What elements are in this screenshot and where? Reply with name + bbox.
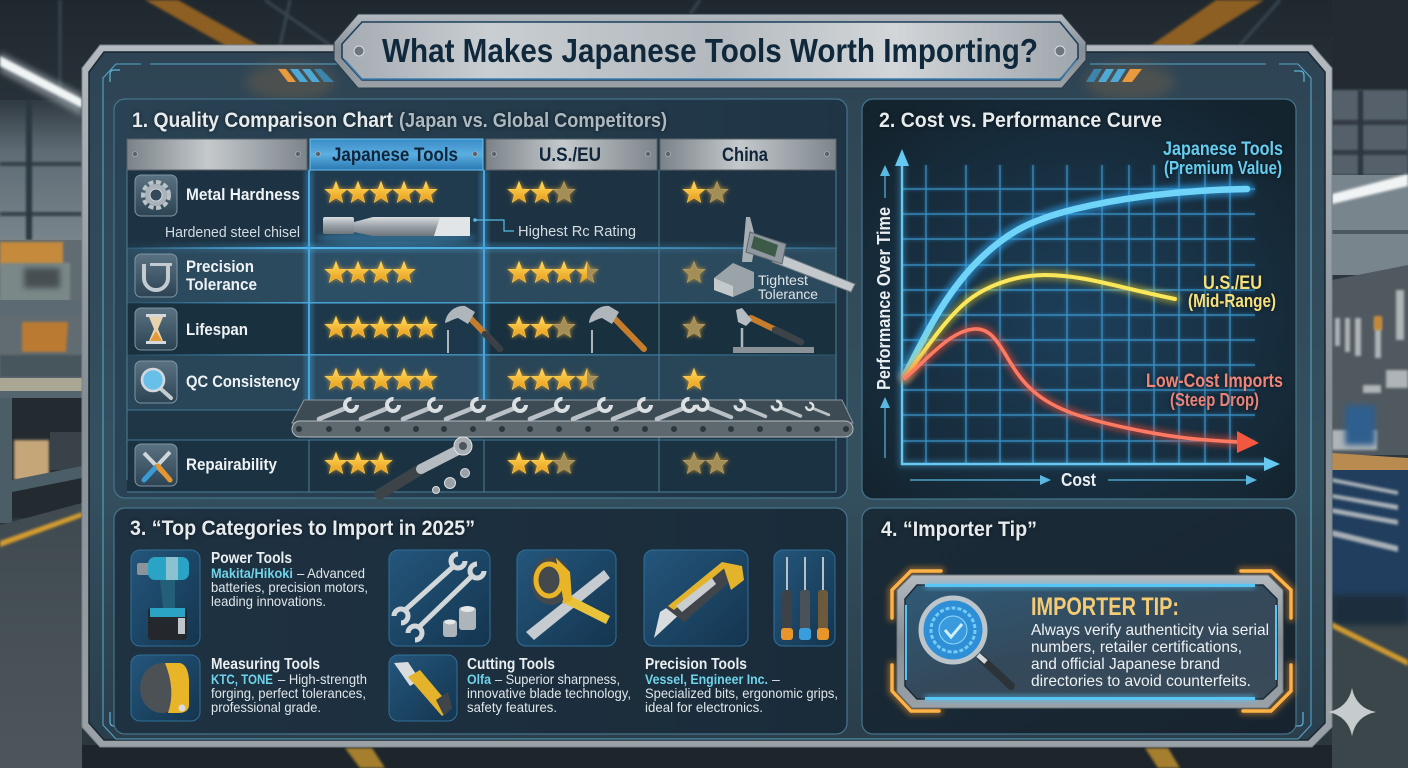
precision tools text: Precision Tools — [645, 656, 747, 673]
orange brackets — [892, 571, 1291, 711]
row: repairability — [135, 444, 728, 486]
cutting tools text: – Superior sharpness, — [495, 671, 620, 687]
curve: us/eu — [905, 275, 1175, 378]
row: precision tolerance: Precision — [186, 257, 254, 276]
precision tools text — [645, 656, 838, 715]
tip text: Always verify authenticity via serial — [1031, 622, 1269, 639]
label: low-cost imports — [1146, 371, 1283, 410]
power tools text: Makita/Hikoki — [211, 565, 293, 581]
curve: low-cost imports — [905, 329, 1259, 453]
tip text: numbers, retailer certifications, — [1031, 639, 1242, 656]
precision tools text: – — [772, 671, 780, 687]
row: metal hardness: Metal Hardness — [186, 185, 300, 204]
tip text — [1031, 593, 1269, 690]
stars — [325, 182, 728, 202]
icon: wrenches and sockets — [389, 550, 490, 646]
y axis title — [874, 165, 894, 458]
tip text: IMPORTER TIP: — [1031, 593, 1179, 621]
label: japanese tools: (Premium Value) — [1164, 158, 1282, 178]
label: japanese tools: Japanese Tools — [1163, 139, 1283, 160]
icon: crossed tools — [135, 444, 177, 486]
icon: ratchet and nuts — [380, 437, 472, 494]
table row bands — [127, 170, 836, 492]
power tools text: – Advanced — [297, 565, 365, 581]
title text: What Makes Japanese Tools Worth Importing? — [382, 32, 1038, 69]
icon: cordless drill — [131, 550, 200, 646]
icon: gear — [135, 175, 177, 216]
conveyor belt of wrenches — [292, 399, 853, 437]
icon: micrometer — [135, 254, 177, 297]
tip text: and official Japanese brand — [1031, 656, 1220, 673]
stars — [325, 368, 705, 389]
y axis title: Performance Over Time — [874, 207, 894, 390]
precision tools text: Vessel, Engineer Inc. — [645, 671, 768, 687]
measuring tools text: forging, perfect tolerances, — [211, 685, 366, 701]
panel 4: importer tip — [862, 508, 1296, 734]
label: low-cost imports: Low-Cost Imports — [1146, 371, 1283, 392]
row: precision tolerance — [135, 254, 705, 297]
curve: japanese tools — [905, 189, 1247, 375]
cutting tools text: innovative blade technology, — [467, 685, 631, 701]
stars — [325, 316, 705, 337]
cutting tools text: safety features. — [467, 699, 557, 715]
table header: U.S./EU — [539, 145, 601, 166]
measuring tools text: KTC, TONE — [211, 671, 273, 687]
icon: cutter — [389, 655, 457, 721]
chart grid — [902, 165, 1255, 464]
title plate — [334, 14, 1086, 88]
cutting tools text — [467, 656, 631, 715]
table grid lines — [127, 170, 836, 492]
table header: China — [722, 145, 768, 166]
label: japanese tools — [1163, 139, 1283, 178]
panel 1 heading: (Japan vs. Global Competitors) — [399, 110, 667, 132]
icon: chisel — [316, 217, 476, 245]
power tools text: batteries, precision motors, — [211, 579, 368, 595]
panel 3 heading: 3. “Top Categories to Import in 2025” — [130, 517, 475, 540]
corner sparkle mark — [1328, 688, 1376, 736]
right hazard stripes — [1086, 69, 1142, 82]
panel 1 heading — [132, 109, 667, 132]
measuring tools text: professional grade. — [211, 699, 321, 715]
caliper label: Tightest — [758, 272, 808, 288]
panel 1 heading: 1. Quality Comparison Chart — [132, 109, 393, 132]
label: low-cost imports: (Steep Drop) — [1170, 390, 1259, 410]
tip card — [897, 575, 1283, 708]
row: lifespan: Lifespan — [186, 320, 248, 339]
panel 1: quality comparison chart — [114, 99, 847, 498]
icon: screwdrivers — [774, 550, 835, 646]
panel 4 heading: 4. “Importer Tip” — [881, 518, 1037, 541]
icon: utility knife — [644, 550, 748, 646]
icon: verification magnifier — [921, 598, 1011, 686]
table header — [127, 139, 836, 170]
icon: hammer china — [733, 308, 814, 353]
icon: magnifier — [135, 361, 177, 403]
cutting tools text: Cutting Tools — [467, 656, 555, 673]
row: qc consistency — [135, 361, 705, 403]
panel 2 heading: 2. Cost vs. Performance Curve — [879, 109, 1162, 132]
measuring tools text: – High-strength — [278, 671, 367, 687]
label: us/eu: U.S./EU — [1203, 273, 1262, 294]
icon: hammer japan — [445, 306, 500, 353]
stars — [325, 452, 728, 473]
icon: hammer us — [589, 306, 644, 353]
table header: Japanese Tools — [332, 145, 458, 166]
power tools text — [211, 550, 368, 609]
power tools text: leading innovations. — [211, 593, 326, 609]
measuring tools text: Measuring Tools — [211, 656, 320, 673]
row: repairability: Repairability — [186, 455, 277, 474]
callout: highest rc rating — [473, 218, 636, 240]
row: metal hardness — [135, 175, 728, 245]
icon: hourglass — [135, 308, 177, 350]
stars — [325, 262, 705, 282]
label: us/eu — [1188, 273, 1276, 311]
row: qc consistency: QC Consistency — [186, 372, 300, 391]
precision tools text: ideal for electronics. — [645, 699, 763, 715]
row: metal hardness: Hardened steel chisel — [165, 225, 300, 241]
icon: tape and ruler — [517, 550, 616, 646]
precision tools text: Specialized bits, ergonomic grips, — [645, 685, 838, 701]
icon: digital caliper: Tolerance — [758, 286, 818, 302]
tip text: directories to avoid counterfeits. — [1031, 673, 1251, 690]
panel 3: top categories — [114, 508, 847, 734]
power tools text: Power Tools — [211, 550, 292, 567]
cutting tools text: Olfa — [467, 671, 491, 687]
callout: highest rc rating: Highest Rc Rating — [518, 223, 636, 240]
x axis title: Cost — [1061, 470, 1096, 490]
x axis title — [910, 470, 1257, 490]
icon: digital caliper — [714, 217, 855, 302]
icon: tape measure — [131, 655, 200, 721]
label: us/eu: (Mid-Range) — [1188, 291, 1276, 311]
row: lifespan — [135, 306, 814, 353]
axes — [895, 149, 1280, 471]
row: precision tolerance: Tolerance — [186, 275, 257, 294]
panel 2: cost vs performance curve — [862, 99, 1296, 499]
measuring tools text — [211, 656, 367, 715]
left hazard stripes — [278, 69, 334, 82]
